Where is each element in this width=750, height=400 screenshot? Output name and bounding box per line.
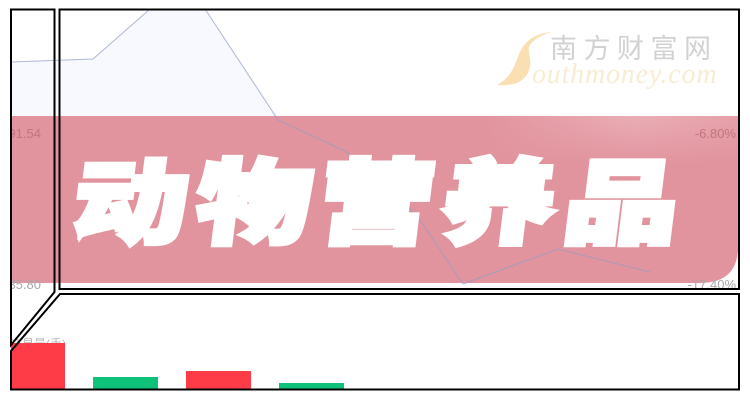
watermark swoosh bbox=[497, 32, 553, 85]
watermark chinese name: 南方财富网 bbox=[550, 34, 718, 64]
frame: main bbox=[60, 10, 739, 289]
frame: bottom bbox=[11, 294, 739, 390]
axis label: right bottom: -17.40% bbox=[688, 277, 736, 292]
bar 1 bbox=[11, 343, 65, 389]
bar 3 bbox=[186, 371, 251, 389]
pink title band bbox=[11, 116, 738, 283]
line chart area fill bbox=[11, 9, 278, 116]
volume bars bbox=[11, 343, 344, 389]
bar 4 bbox=[279, 383, 344, 389]
axis label: volume: 交易量(手) bbox=[10, 336, 66, 351]
line chart trend bbox=[11, 9, 650, 284]
watermark logo bbox=[497, 32, 718, 90]
axis label: left bottom: 35.80 bbox=[8, 277, 41, 292]
watermark domain: outhmoney.com bbox=[532, 59, 717, 90]
axis label: left top: 91.54 bbox=[8, 126, 41, 141]
frame: left bbox=[11, 10, 54, 345]
bar 2 bbox=[93, 377, 158, 389]
title: 动物营养品 bbox=[67, 129, 697, 263]
axis label: right top: -6.80% bbox=[695, 126, 736, 141]
